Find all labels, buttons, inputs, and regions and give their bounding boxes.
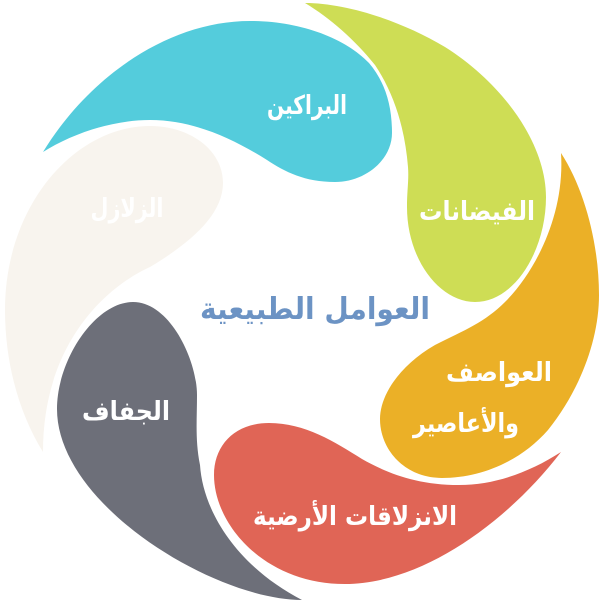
petal: drought [57, 302, 302, 600]
title: العوامل الطبيعية [200, 292, 430, 327]
petal: floods [305, 3, 546, 302]
petal: landslides: الانزلاقات الأرضية [253, 500, 457, 532]
petal: volcanoes [43, 21, 392, 182]
petal: storms and hurricanes: العواصف [446, 358, 552, 388]
petal: landslides [214, 423, 561, 584]
petal: floods: الفيضانات [419, 197, 535, 227]
petal: storms and hurricanes [380, 153, 599, 478]
petal: earthquakes: الزلازل [90, 194, 164, 224]
petal: volcanoes: البراكين [267, 91, 347, 121]
petal: drought: الجفاف [82, 397, 170, 427]
petal: earthquakes [5, 126, 223, 452]
petal: storms and hurricanes: والأعاصير [411, 407, 519, 439]
